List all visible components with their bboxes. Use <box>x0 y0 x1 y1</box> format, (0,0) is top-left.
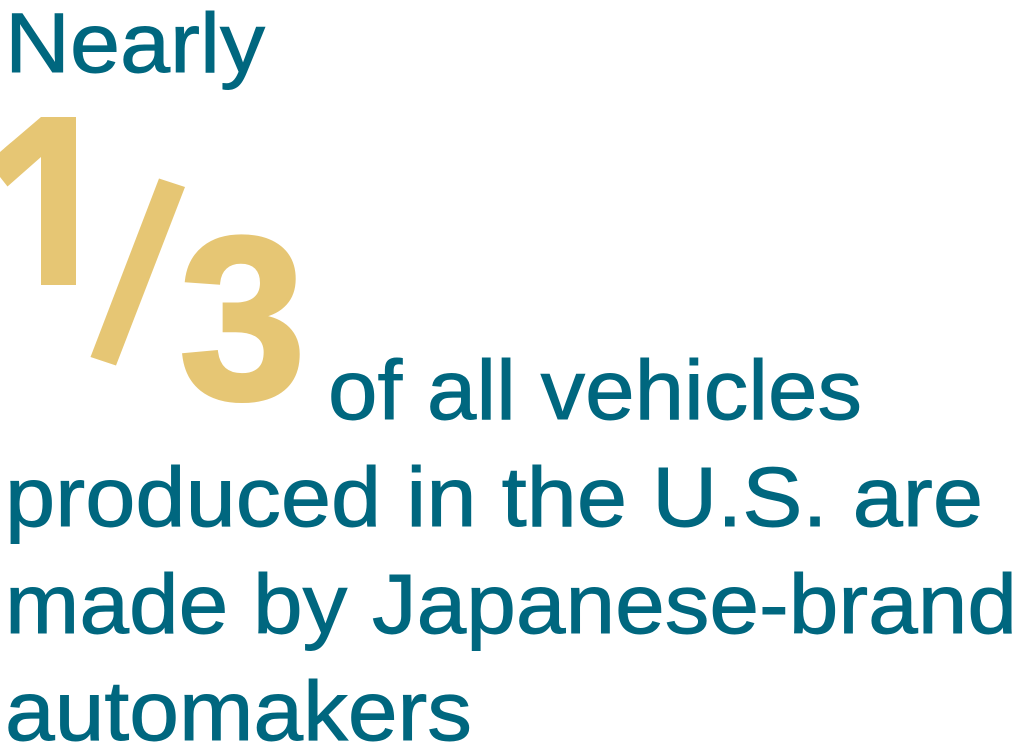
text line: of all vehicles: of all vehicles <box>328 343 862 437</box>
text line: produced in the U.S. are: produced in the U.S. are <box>5 450 983 544</box>
fraction slash <box>90 178 185 366</box>
fraction: 1/3 <box>0 117 300 403</box>
numeral 3: 3 <box>179 189 306 448</box>
text line: made by Japanese-brand: made by Japanese-brand <box>5 557 1017 651</box>
